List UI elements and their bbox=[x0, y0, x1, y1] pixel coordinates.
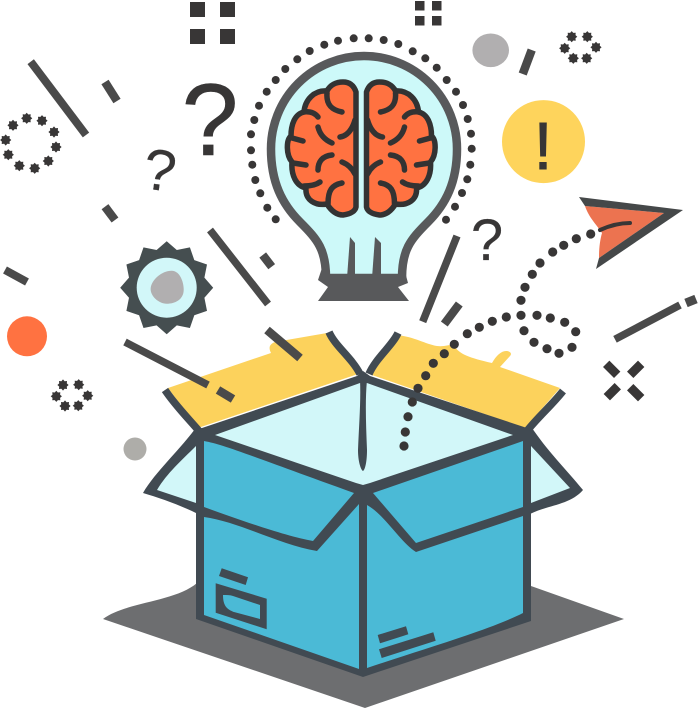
exclamation mark: ! bbox=[534, 109, 552, 184]
yellow circle bbox=[502, 100, 585, 183]
dotted flight trail bbox=[399, 229, 595, 451]
filaments bbox=[347, 237, 381, 278]
star ring top right bbox=[559, 31, 602, 64]
upper left panel bbox=[204, 441, 354, 541]
grey dot top right bbox=[472, 34, 509, 67]
gear hub bbox=[137, 258, 197, 318]
plane fill bbox=[585, 206, 664, 258]
grey dot left bbox=[124, 438, 146, 460]
shipping label bbox=[216, 568, 267, 629]
left side flap bbox=[143, 425, 198, 514]
flap outlines bbox=[165, 332, 563, 431]
upper right panel bbox=[373, 441, 523, 543]
label lines bbox=[378, 626, 436, 658]
star ring lower left bbox=[51, 379, 93, 412]
box interior bbox=[215, 383, 513, 485]
gear bbox=[120, 241, 213, 334]
alert badge bbox=[502, 100, 585, 184]
bulb glass bbox=[271, 56, 457, 278]
left hemisphere bbox=[287, 82, 356, 215]
lower right panel bbox=[367, 505, 523, 668]
burst lines bbox=[5, 50, 696, 399]
right yellow flap bbox=[372, 335, 560, 428]
orange dot bbox=[7, 316, 47, 356]
top left squares bbox=[190, 2, 235, 44]
open cardboard box bbox=[143, 332, 583, 677]
box body outline bbox=[196, 371, 531, 677]
question mark by bulb: ? bbox=[471, 208, 503, 273]
large question mark: ? bbox=[182, 63, 238, 177]
right hemisphere bbox=[366, 82, 435, 215]
left yellow flap bbox=[168, 333, 358, 428]
top center squares bbox=[415, 1, 442, 26]
paper plane bbox=[579, 197, 683, 269]
right side flap bbox=[530, 425, 583, 514]
plane outline bbox=[579, 197, 683, 269]
gear center bbox=[151, 271, 184, 304]
gear body bbox=[120, 241, 213, 334]
bulb base bbox=[318, 268, 409, 301]
small question mark: ? bbox=[139, 136, 180, 205]
plane fold bbox=[600, 223, 630, 230]
light bulb bbox=[271, 56, 457, 301]
brain bbox=[287, 82, 435, 215]
ground shadow bbox=[103, 583, 624, 708]
x mark bbox=[606, 364, 641, 398]
lower left panel bbox=[204, 504, 359, 669]
star ring top left bbox=[0, 113, 62, 174]
dotted ring around bulb bbox=[247, 34, 476, 224]
center seam bbox=[358, 380, 367, 471]
